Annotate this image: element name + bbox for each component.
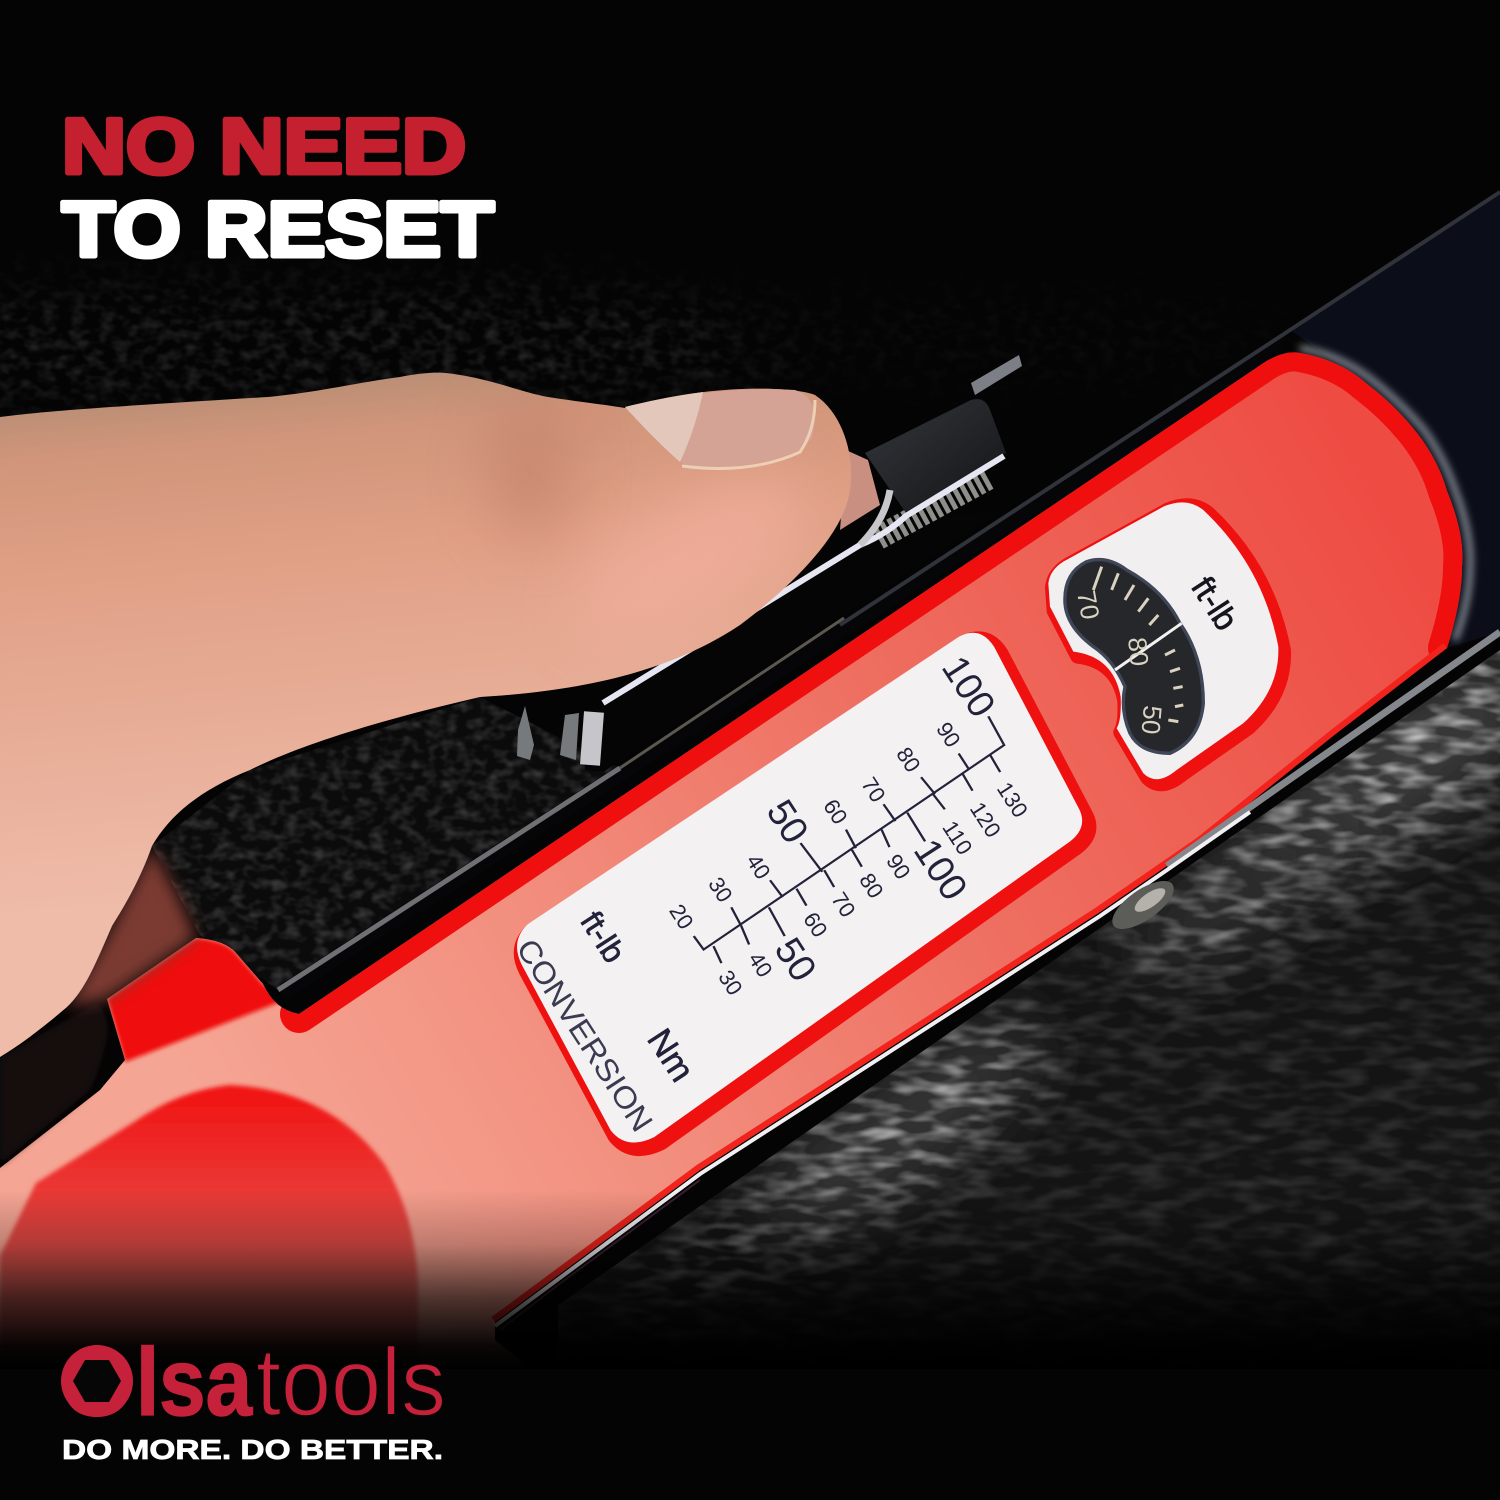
dial ticks bbox=[1093, 567, 1183, 722]
logo bbox=[59, 1327, 446, 1465]
scale axis and ticks bbox=[694, 716, 1004, 963]
scale numbers: Nm side: 60 bbox=[798, 908, 833, 942]
ratchet wrench bbox=[517, 355, 1022, 772]
carpet: patch under the hand bbox=[150, 690, 630, 1000]
ratchet arm bbox=[581, 512, 1000, 772]
logo wordmark: tools bbox=[256, 1329, 446, 1436]
dial frame bbox=[1048, 502, 1283, 783]
scale numbers: Nm side: 100 bbox=[905, 832, 975, 908]
dial face bbox=[1065, 560, 1203, 753]
bottom fade to black bbox=[0, 1190, 1500, 1370]
dial unit label: ft-lb bbox=[1183, 571, 1245, 637]
logo wordmark: O bbox=[59, 1327, 135, 1437]
scale numbers: Nm side bbox=[713, 778, 1033, 1000]
handle grip dark patch bbox=[0, 1003, 108, 1164]
dial needle bbox=[1115, 623, 1182, 670]
ratchet top tip bbox=[971, 355, 1022, 395]
ratchet head block bbox=[865, 399, 1006, 513]
dial numbers: 50 bbox=[1135, 704, 1168, 736]
logo wordmark: lsa bbox=[136, 1329, 253, 1436]
scale numbers: ft-lb side: 100 bbox=[933, 649, 1003, 725]
panel labels bbox=[509, 905, 702, 1138]
panel labels: Nm bbox=[639, 1022, 702, 1089]
carpet: lower right textured surface bbox=[569, 650, 1500, 1320]
dial numbers bbox=[1071, 588, 1168, 736]
scale numbers: Nm side: 40 bbox=[743, 948, 778, 982]
ratchet gear teeth bbox=[878, 478, 988, 538]
title line 2: TO RESET bbox=[62, 185, 494, 273]
scale numbers: Nm side: 120 bbox=[965, 798, 1006, 842]
scale numbers: Nm side: 80 bbox=[854, 869, 889, 903]
scale numbers: Nm side: 50 bbox=[766, 931, 824, 989]
scale numbers: ft-lb side: 40 bbox=[741, 850, 776, 884]
hand and thumb bbox=[0, 373, 851, 1057]
scale numbers: Nm side: 70 bbox=[826, 888, 861, 922]
logo tagline: DO MORE. DO BETTER. bbox=[62, 1434, 443, 1465]
scale numbers: ft-lb side: 80 bbox=[891, 743, 926, 777]
scale numbers: ft-lb side: 90 bbox=[931, 718, 966, 752]
wrench: red body with salmon panel bbox=[0, 352, 1462, 1400]
logo wordmark bbox=[59, 1327, 446, 1437]
wrench: threaded bolt bbox=[1105, 872, 1181, 938]
scale numbers: Nm side: 30 bbox=[713, 966, 748, 1000]
dial numbers: 70 bbox=[1071, 588, 1106, 622]
scale numbers: ft-lb side: 20 bbox=[664, 900, 699, 934]
carpet: upper dark texture bbox=[0, 270, 791, 415]
scale numbers: Nm side: 130 bbox=[992, 778, 1033, 822]
scale numbers: ft-lb side bbox=[664, 649, 1003, 934]
dial numbers: 80 bbox=[1122, 636, 1155, 667]
scale numbers: Nm side: 110 bbox=[937, 816, 977, 859]
thumbnail bbox=[625, 389, 815, 470]
wrench: chrome edge strip bbox=[495, 632, 1500, 1330]
title line 1: NO NEED bbox=[62, 102, 466, 190]
scale numbers: ft-lb side: 70 bbox=[856, 773, 891, 807]
dial window bbox=[1048, 502, 1283, 783]
ratchet chrome highlights bbox=[590, 456, 1004, 765]
shadow between hand and handle bbox=[67, 846, 196, 1007]
ratchet pawl pieces bbox=[517, 706, 579, 760]
title bbox=[62, 102, 494, 273]
panel labels: ft-lb bbox=[573, 905, 633, 969]
scale numbers: Nm side: 90 bbox=[881, 850, 916, 884]
panel labels: CONVERSION bbox=[509, 933, 660, 1138]
conversion scale panel bbox=[509, 633, 1088, 1149]
scale numbers: ft-lb side: 60 bbox=[818, 795, 853, 829]
scale numbers: ft-lb side: 50 bbox=[758, 793, 816, 851]
scale numbers: ft-lb side: 30 bbox=[703, 873, 738, 907]
panel frame and white label bbox=[517, 633, 1088, 1149]
wrench: dark shaft bbox=[278, 190, 1500, 1000]
fingertip behind ratchet bbox=[840, 450, 880, 530]
